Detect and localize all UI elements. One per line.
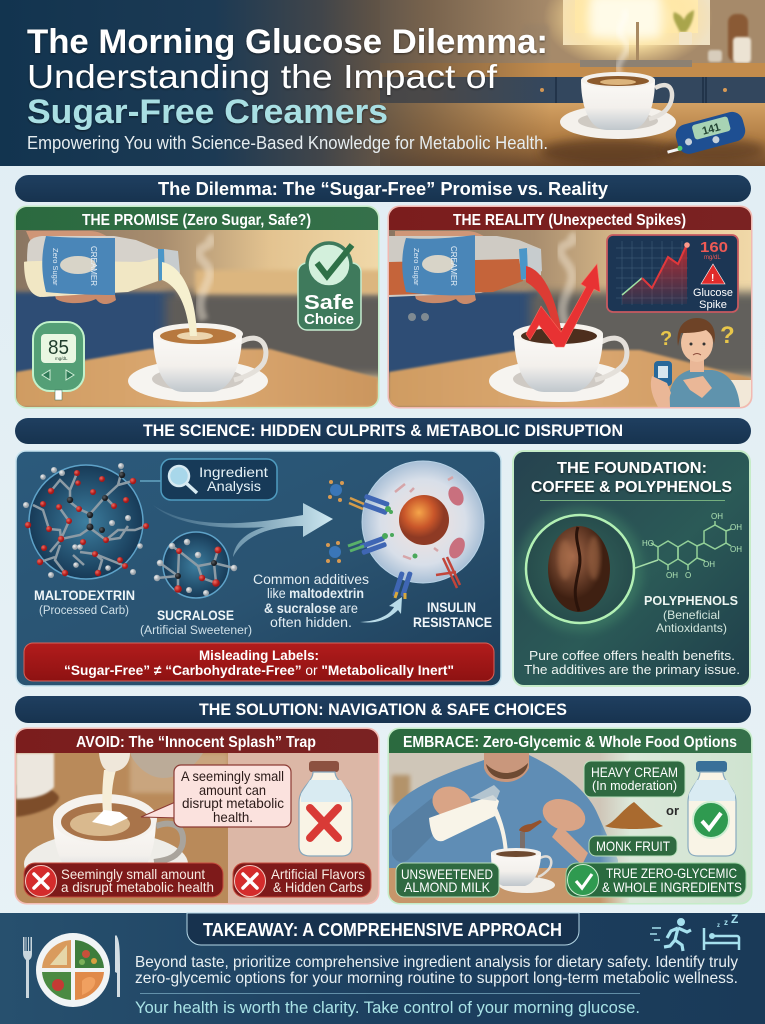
icon: bottle with check — [688, 761, 736, 856]
text: takeaway body — [135, 954, 738, 987]
warning: seemingly small amount — [24, 863, 223, 897]
panel: the promise — [6, 206, 390, 408]
label: unsweetened almond milk — [396, 863, 499, 897]
icon: bottle with red X — [299, 761, 352, 856]
icon: polyphenol structure: OH — [711, 512, 723, 521]
icon: knife — [115, 935, 120, 997]
label: polyphenols — [644, 593, 738, 635]
text: foundation note: The additives are the primary issue. — [524, 662, 740, 677]
panel: the foundation — [513, 451, 750, 686]
avoid photo background — [16, 750, 378, 903]
chart: glucose spike — [607, 235, 738, 312]
icon: polyphenol structure: HO — [642, 539, 654, 548]
callout: misleading labels: “Sugar-Free” ≠ “Carbohydrate-Free” or "Metabolically Inert" — [64, 662, 454, 678]
icon: coffee cup on saucer — [560, 72, 676, 139]
label: heavy cream: (In moderation) — [592, 778, 677, 793]
label: unsweetened almond milk: ALMOND MILK — [404, 879, 491, 895]
icon: confused person with meter: ? — [720, 322, 735, 349]
icon: healthy plate — [36, 933, 110, 1007]
header hero banner — [0, 0, 765, 166]
icon: coffee bean in glowing ring — [517, 506, 643, 632]
panel: embrace — [388, 728, 752, 904]
label: true zero-glycemic: TRUE ZERO-GLYCEMIC — [606, 865, 737, 881]
icon: confused person with meter — [651, 318, 740, 407]
label: true zero-glycemic — [566, 863, 746, 897]
warning: artificial flavors — [233, 863, 371, 897]
section heading: the science: THE SCIENCE: HIDDEN CULPRITS & METABOLIC DISRUPTION — [143, 422, 623, 440]
subtitle: Empowering You with Science-Based Knowledge for Metabolic Health. — [27, 133, 548, 153]
heading: foundation: THE FOUNDATION: — [557, 460, 707, 477]
chart: glucose spike: 160 — [700, 239, 728, 256]
section heading: the science — [15, 418, 751, 444]
callout: small amount bubble — [141, 765, 291, 827]
warning: artificial flavors: Artificial Flavors — [271, 866, 365, 882]
label: sucralose — [140, 608, 252, 637]
icon: polyphenol structure: OH — [730, 545, 742, 554]
text: common additives note: often hidden. — [270, 615, 352, 630]
heading tab: takeaway: TAKEAWAY: A COMPREHENSIVE APPROACH — [203, 919, 562, 940]
text: common additives note: like maltodextrin — [267, 586, 364, 601]
icon: sleeping bed: z — [724, 918, 728, 927]
section heading: the solution — [15, 696, 751, 723]
icon: ingredient analysis tag: Ingredient — [199, 464, 268, 480]
warning: seemingly small amount: a disrupt metabolic health — [61, 879, 214, 895]
label: maltodextrin — [34, 588, 135, 617]
callout: small amount bubble: amount can — [199, 782, 266, 798]
text: takeaway closing line: Your health is worth the clarity. Take control of your morning glucose. — [135, 999, 640, 1017]
badge: safe choice: Choice — [304, 312, 354, 328]
icon: polyphenol structure: OH — [703, 560, 715, 569]
icon: creamer bottle with hand: CREAMER — [89, 246, 98, 286]
icon: cup and saucer — [489, 323, 629, 402]
title: Understanding the Impact of — [27, 58, 498, 95]
label: heavy cream — [584, 761, 685, 797]
embrace photo background — [389, 750, 629, 903]
panel: takeaway — [0, 912, 765, 1024]
icon: creamer bottle with hand — [389, 231, 542, 304]
icon: cell with insulin receptors — [326, 461, 484, 599]
icon: polyphenol structure — [635, 512, 742, 580]
label: sucralose: (Artificial Sweetener) — [140, 625, 252, 637]
text: takeaway body: Beyond taste, prioritize comprehensive ingredient analysis for dietary safety. Identify truly — [135, 954, 738, 971]
warning: seemingly small amount: Seemingly small amount — [61, 866, 205, 882]
panel: the reality — [379, 206, 765, 410]
icon: maltodextrin molecule — [23, 463, 149, 579]
right side light backdrop — [600, 750, 751, 903]
title — [27, 23, 548, 131]
label: polyphenols: (Beneficial — [663, 608, 720, 622]
icon: red pour and spike arrows — [526, 264, 600, 347]
text: common additives note — [253, 572, 369, 630]
text: takeaway body: zero-glycemic options for your morning routine to support long-term metabolic wellness. — [135, 970, 738, 987]
header: avoid — [16, 729, 378, 753]
icon: creamer bottle with hand: Zero Sugar — [412, 248, 421, 286]
icon: cup and saucer — [128, 323, 268, 402]
icon: sleeping bed: Z — [731, 912, 738, 926]
label: maltodextrin: MALTODEXTRIN — [34, 588, 135, 603]
text: common additives note: & sucralose are — [264, 601, 358, 616]
title: Sugar-Free Creamers — [27, 93, 388, 131]
header: embrace: EMBRACE: Zero-Glycemic & Whole Food Options — [403, 734, 737, 751]
label: insulin resistance: RESISTANCE — [413, 615, 492, 630]
icon: polyphenol structure: OH — [666, 571, 678, 580]
icon: ingredient analysis tag: Analysis — [207, 478, 261, 494]
label: heavy cream: HEAVY CREAM — [591, 764, 678, 780]
text: foundation note: Pure coffee offers health benefits. — [529, 648, 735, 663]
icon: man pouring milk — [389, 753, 618, 868]
chart: glucose spike: ! — [711, 273, 714, 284]
icon: fork — [23, 937, 32, 998]
icon: glucose meter reading 85: mg/dL — [55, 356, 68, 361]
chart: glucose spike: mg/dL — [704, 255, 721, 261]
text: foundation note — [524, 648, 740, 677]
icon: glucose meter — [667, 112, 746, 154]
icon: sleeping bed — [704, 912, 739, 950]
label: sucralose: SUCRALOSE — [157, 608, 234, 623]
icon: glucose meter: 141 — [701, 121, 722, 138]
badge: safe choice — [298, 243, 361, 330]
icon: polyphenol structure: O — [685, 571, 691, 580]
heading: foundation — [531, 460, 732, 496]
header: avoid: AVOID: The “Innocent Splash” Trap — [76, 734, 316, 751]
label: unsweetened almond milk: UNSWEETENED — [401, 866, 493, 882]
section heading: the solution: THE SOLUTION: NAVIGATION & SAFE CHOICES — [199, 701, 567, 719]
warning: artificial flavors: & Hidden Carbs — [273, 879, 363, 895]
badge: safe choice: Safe — [304, 292, 354, 314]
label: polyphenols: Antioxidants) — [656, 621, 727, 635]
icon: cup with splash — [24, 753, 203, 868]
icon: white cup and saucer — [491, 848, 555, 893]
icon: creamer bottle with hand — [24, 231, 180, 304]
icon: creamer bottle with hand: Zero Sugar — [51, 248, 60, 286]
label: true zero-glycemic: & WHOLE INGREDIENTS — [602, 879, 742, 895]
label: polyphenols: POLYPHENOLS — [644, 593, 738, 608]
label: monk fruit: MONK FRUIT — [596, 838, 670, 854]
label: maltodextrin: (Processed Carb) — [39, 605, 129, 617]
callout: small amount bubble: disrupt metabolic — [182, 795, 284, 811]
arrow: science flow — [153, 503, 333, 557]
callout: misleading labels: Misleading Labels: — [199, 647, 319, 663]
panel: avoid — [14, 728, 380, 904]
icon: sleeping bed: z — [717, 923, 720, 929]
header: the promise: THE PROMISE (Zero Sugar, Safe?) — [82, 212, 311, 229]
arrow: note to cell — [360, 597, 402, 622]
text: or: or — [666, 803, 679, 818]
icon: sucralose molecule — [154, 532, 237, 598]
section heading: dilemma — [15, 175, 751, 202]
label: insulin resistance — [413, 600, 492, 630]
icon: runner — [650, 918, 691, 951]
chart: glucose spike: Glucose — [693, 287, 733, 299]
label: insulin resistance: INSULIN — [427, 600, 476, 615]
icon: steam — [560, 234, 573, 325]
heading: foundation: COFFEE & POLYPHENOLS — [531, 479, 732, 496]
section heading: dilemma: The Dilemma: The “Sugar-Free” Promise vs. Reality — [158, 178, 609, 199]
icon: steam — [618, 10, 627, 76]
header: embrace — [389, 729, 751, 753]
chart: glucose spike: Spike — [699, 299, 727, 311]
label: monk fruit — [589, 836, 677, 856]
heading tab: takeaway — [187, 913, 579, 945]
reality photo background — [379, 207, 765, 410]
promise photo background — [6, 207, 390, 407]
panel: hidden culprits — [16, 451, 501, 686]
icon: glucose meter reading 85: 85 — [48, 337, 69, 359]
callout: small amount bubble: A seemingly small — [181, 768, 284, 784]
header: the reality — [389, 207, 751, 230]
icon: monk fruit powder — [605, 802, 663, 829]
header: the reality: THE REALITY (Unexpected Spikes) — [453, 212, 686, 229]
icon: steam — [199, 236, 211, 320]
icon: creamer bottle with hand: CREAMER — [449, 246, 458, 286]
title: The Morning Glucose Dilemma: — [27, 23, 548, 61]
icon: confused person with meter: ? — [660, 328, 672, 350]
header: the promise — [16, 207, 378, 230]
kitchen background photo — [322, 0, 765, 166]
callout: misleading labels — [24, 643, 494, 681]
text: common additives note: Common additives — [253, 572, 369, 587]
icon: polyphenol structure: OH — [730, 523, 742, 532]
icon: pour stream — [162, 262, 197, 336]
icon: ingredient analysis tag — [140, 459, 277, 500]
callout: small amount bubble: health. — [213, 809, 253, 825]
dark left fade — [0, 0, 536, 166]
icon: glucose meter reading 85 — [33, 322, 84, 400]
